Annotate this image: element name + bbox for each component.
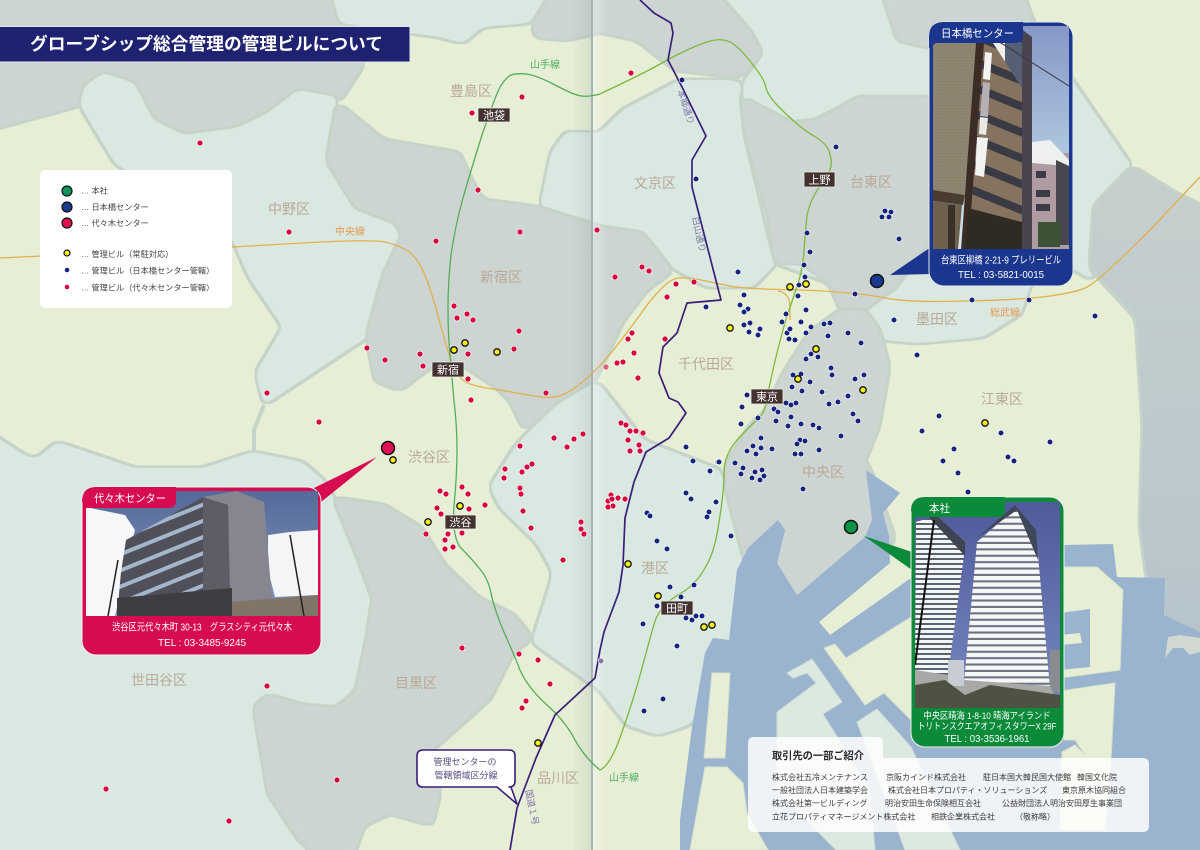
tab: Nihonbashi center: [929, 22, 1023, 48]
management territory boundary line: [510, 0, 721, 850]
legend: Yoyogi managed: … 管理ビル（代々木センター管轄）: [81, 282, 214, 292]
station labels: [432, 108, 835, 615]
legend: Nihonbashi center: … 日本橋センター: [81, 202, 149, 212]
callout pointer: [314, 457, 377, 502]
station: Shibuya: 渋谷: [450, 516, 472, 529]
line label: Yamanote south: 山手線: [609, 771, 639, 784]
road and line labels: [335, 58, 1020, 826]
marker: Nihonbashi center: [870, 274, 884, 288]
ward labels: 渋谷区: [408, 449, 450, 465]
managed buildings: Nihonbashi center (blue): [598, 78, 1098, 714]
ward boundary line: [254, 405, 264, 452]
legend: head office: … 本社: [81, 186, 108, 196]
ward labels: 目黒区: [395, 675, 437, 691]
ward labels: 文京区: [634, 175, 676, 191]
callout: management territory boundary: 管轄領域区分線: [434, 770, 498, 780]
clients row 4: 立花プロパティマネージメント株式会社: [772, 812, 915, 822]
legend: staffed building: … 管理ビル（常駐対応）: [81, 249, 173, 259]
station: Tokyo: 東京: [756, 390, 778, 404]
station: Ueno: [804, 172, 835, 187]
panel: head office: [864, 497, 1064, 747]
photo: Nihonbashi building: [933, 26, 1069, 249]
panel: Nihonbashi center: [890, 0, 1073, 286]
station: Shinjuku: [432, 362, 464, 377]
address: 渋谷区元代々木町 30-13 グラスシティ元代々木: [112, 620, 292, 634]
ward labels: 新宿区: [480, 269, 522, 285]
tab label: 本社: [929, 501, 950, 515]
line label: Sobu: 総武線: [990, 306, 1020, 319]
district: top-left gray: [0, 0, 364, 135]
legend: Nihonbashi managed: … 管理ビル（日本橋センター管轄）: [81, 266, 214, 276]
clients row 2: 株式会社日本プロパティ・ソリューションズ: [888, 785, 1047, 795]
station: Tokyo: [751, 389, 783, 404]
clients row 2: [772, 785, 1126, 795]
station: Tamachi: [661, 601, 693, 615]
telephone: TEL : 03-3536-1961: [944, 733, 1030, 745]
telephone: TEL : 03-5821-0015: [958, 269, 1044, 281]
clients row 1: 株式会社五冷メンテナンス: [772, 772, 868, 782]
clients row 1: 韓国文化院: [1077, 772, 1117, 782]
district: top gray: [875, 0, 1032, 47]
district: east cyan: [700, 0, 1132, 343]
ward labels: 世田谷区: [131, 672, 187, 688]
ward labels: 豊島区: [450, 83, 492, 99]
marker: Yoyogi center: [382, 442, 394, 454]
station: Ueno: 上野: [808, 174, 830, 186]
station: Ikebukuro: 池袋: [483, 108, 505, 122]
ward labels: 台東区: [850, 174, 892, 190]
tab: head office: [911, 497, 1005, 517]
station: Tamachi: 田町: [666, 602, 688, 615]
clients heading: 取引先の一部ご紹介: [772, 749, 864, 762]
ward labels: 中央区: [802, 464, 844, 480]
address: 台東区柳橋 2-21-9 プレリービル: [941, 254, 1061, 266]
station: Ikebukuro: [478, 108, 510, 122]
clients row 3: 株式会社第一ビルディング: [772, 798, 867, 808]
clients row 3: [772, 798, 1122, 808]
ward labels: 墨田区: [916, 311, 958, 327]
clients row 1: 京阪カインド株式会社: [886, 772, 966, 782]
callout pointer: [864, 536, 912, 570]
district: Bunkyo: [540, 80, 776, 287]
district: Nakano: [80, 73, 402, 405]
clients row 4: [772, 812, 1055, 822]
district: Setagaya: [0, 420, 373, 850]
tab label: 日本橋センター: [941, 26, 1014, 40]
station: Shinjuku: 新宿: [437, 362, 459, 376]
road label: Hongo-dori: 本郷通り: [676, 88, 697, 126]
railway: Yamanote line: [448, 40, 831, 770]
islands and landfill: [690, 567, 1200, 850]
managed buildings: Yoyogi center (red): [103, 70, 697, 824]
legend: Yoyogi center: … 代々木センター: [81, 218, 149, 228]
clients row 2: 東京原木協同組合: [1062, 785, 1126, 795]
ward labels: 千代田区: [678, 356, 734, 372]
tab label: 代々木センター: [94, 492, 166, 505]
legend panel: [40, 170, 232, 308]
callout: management territory boundary: [417, 750, 517, 804]
photo: head office towers: [915, 502, 1060, 708]
clients row 2: 一般社団法人日本建築学会: [772, 785, 868, 795]
district: top center gray: [532, 0, 765, 77]
book fold: [572, 0, 607, 850]
ward labels: [131, 83, 1023, 786]
clients row 3: 公益財団法人明治安田厚生事業団: [1002, 798, 1122, 808]
ward labels: 品川区: [537, 770, 579, 786]
ward labels: 江東区: [981, 391, 1023, 407]
district: top cyan: [325, 0, 551, 43]
address line 2: トリトンスクエアオフィスタワーX 29F: [918, 722, 1057, 732]
district: Minato: [490, 383, 760, 735]
telephone: TEL : 03-3485-9245: [158, 637, 246, 649]
ward labels: 港区: [641, 560, 669, 576]
district: Meguro: [254, 497, 532, 850]
station: Shibuya: [445, 515, 476, 529]
address line 1: 中央区晴海 1-8-10 晴海アイランド: [924, 710, 1050, 722]
railway: Chuo and Sobu line: [0, 177, 1200, 397]
panel: clients: [748, 737, 1149, 832]
line label: Yamanote north: 山手線: [530, 58, 560, 71]
district: east gray: [1090, 167, 1200, 640]
clients row 4: （敬称略）: [1015, 812, 1055, 822]
title: グローブシップ総合管理の管理ビルについて: [30, 34, 383, 54]
clients row 1: [772, 772, 1117, 782]
district: Chuo: [726, 310, 895, 610]
legend: head office: [62, 186, 108, 196]
district: Taito: [741, 97, 960, 312]
callout pointer: [890, 247, 931, 275]
tab: Yoyogi center: [82, 487, 176, 508]
title: [0, 26, 410, 62]
line label: Chuo: 中央線: [335, 225, 365, 238]
managed buildings: staffed (yellow): [390, 281, 988, 746]
district: Shinjuku: [327, 103, 673, 430]
water: [680, 470, 1200, 850]
clients row 1: 駐日本国大韓民国大使館: [983, 772, 1071, 782]
clients row 4: 相鉄企業株式会社: [931, 812, 995, 822]
clients row 3: 明治安田生命保険相互会社: [885, 798, 981, 808]
road label: Hakusan-dori: 白山通り: [690, 216, 709, 253]
panel: Yoyogi center: [82, 457, 377, 655]
callout: management territory boundary: 管理センターの: [433, 756, 497, 767]
road label: National Route 1: 国道１号: [523, 789, 542, 826]
ward labels: 中野区: [268, 201, 310, 217]
photo: Yoyogi building: [86, 491, 318, 616]
marker: head office: [844, 520, 858, 534]
